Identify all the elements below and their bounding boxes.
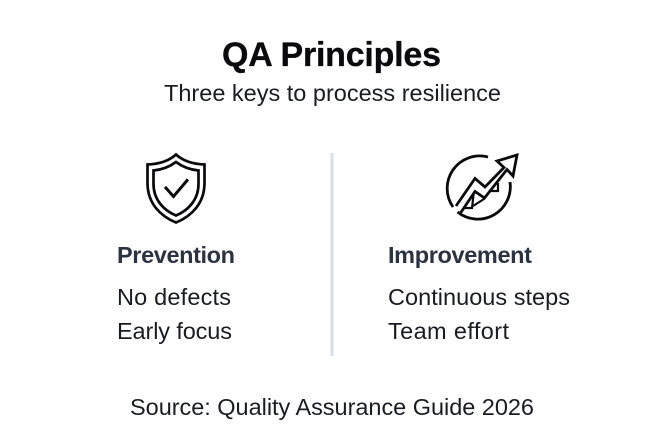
icon: shield with check	[148, 154, 204, 222]
icon: rising arrow in circle	[447, 155, 517, 219]
heading: improvement: Improvement	[388, 242, 532, 268]
text: early focus: Early focus	[117, 318, 232, 344]
title: QA Principles	[222, 36, 441, 74]
text: no defects: No defects	[117, 284, 231, 310]
column divider	[330, 153, 334, 356]
heading: prevention: Prevention	[117, 242, 235, 268]
text: team effort: Team effort	[388, 318, 509, 344]
source line: Source: Quality Assurance Guide 2026	[130, 394, 534, 420]
text: continuous steps: Continuous steps	[388, 284, 570, 310]
panel: prevention	[117, 154, 235, 344]
subtitle: Three keys to process resilience	[164, 80, 501, 106]
panel: improvement	[388, 155, 570, 344]
